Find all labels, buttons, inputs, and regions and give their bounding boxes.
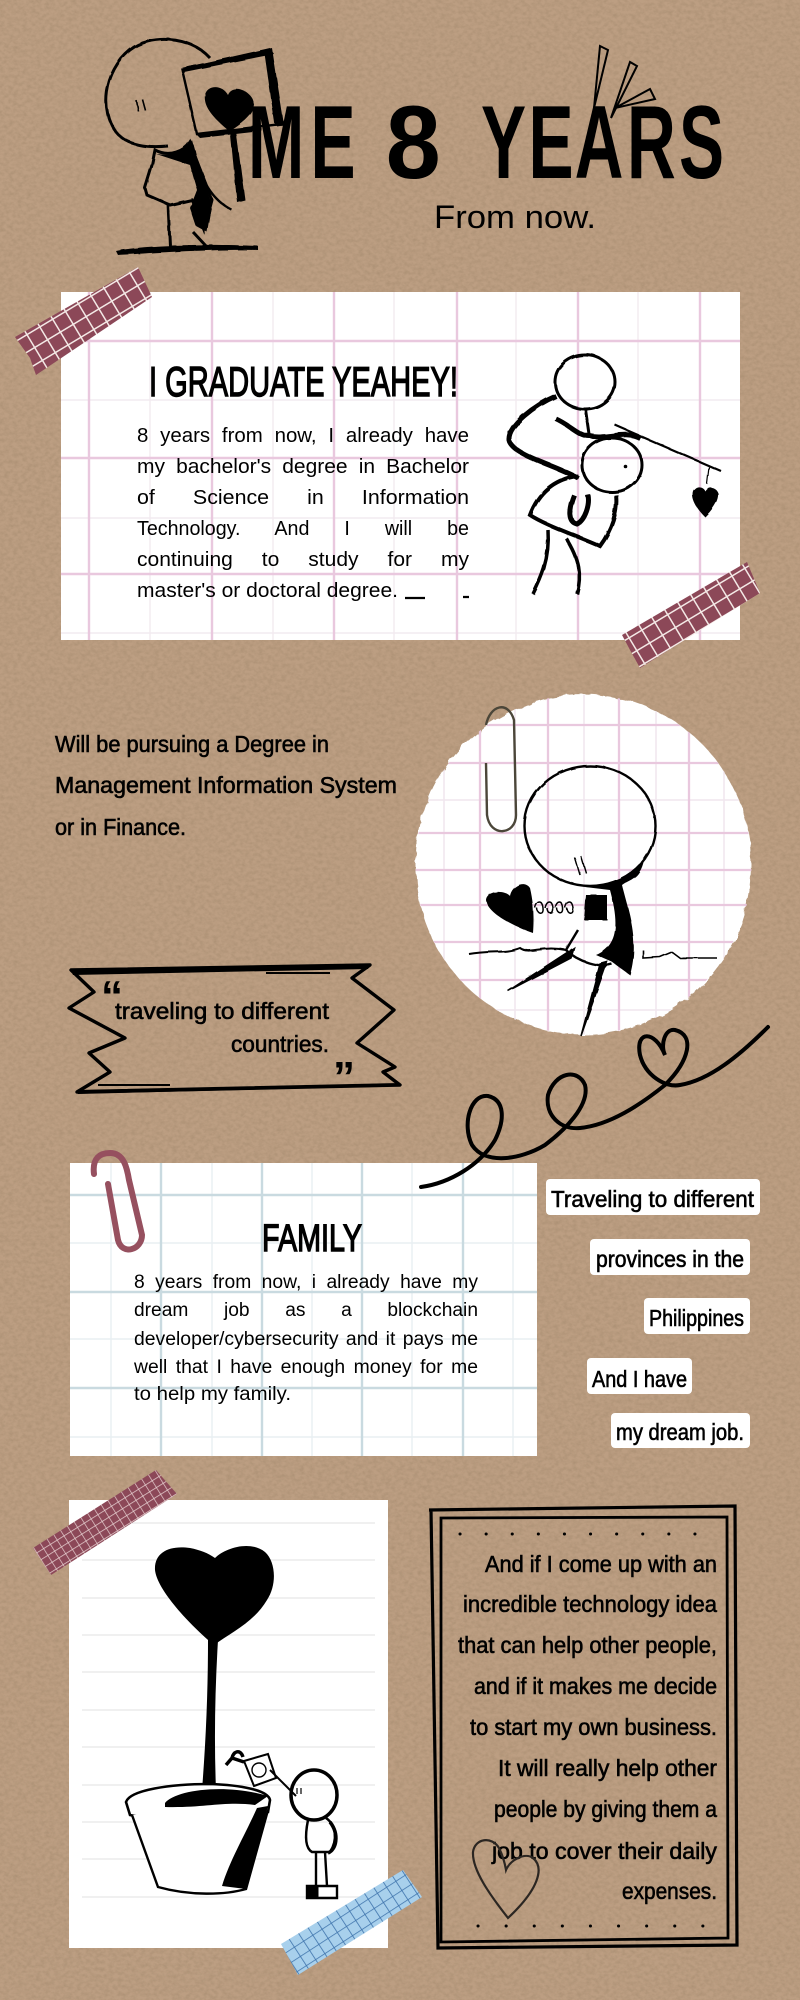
curly line with heart bbox=[421, 1027, 768, 1187]
text block: family: well that I have enough money for me bbox=[133, 1357, 478, 1378]
title: YEARS bbox=[481, 84, 724, 201]
text block: business idea: expenses. bbox=[622, 1878, 717, 1904]
subtitle: From now. bbox=[434, 199, 596, 235]
icon: opening quote: “ bbox=[101, 972, 123, 1021]
title: ME bbox=[248, 84, 356, 201]
text block: family: developer/cybersecurity and it pays me bbox=[134, 1329, 478, 1350]
label: dream job bbox=[611, 1413, 750, 1448]
illustration: stick figure holding heart sign bbox=[106, 39, 284, 255]
banner: traveling quote bbox=[69, 965, 400, 1102]
labels: traveling and dream job bbox=[546, 1179, 760, 1448]
text block: degree: Will be pursuing a Degree in bbox=[55, 731, 329, 757]
text block: business idea: job to cover their daily bbox=[491, 1838, 717, 1864]
text block: business idea: And if I come up with an bbox=[485, 1551, 717, 1577]
label: Philippines bbox=[644, 1298, 750, 1334]
washi tape: maroon fine bbox=[33, 1470, 177, 1575]
label: and I have: And I have bbox=[592, 1366, 687, 1392]
text block: degree bbox=[55, 731, 397, 840]
text block: graduate: my bachelor's degree in Bachelor bbox=[137, 456, 469, 478]
illustration: heart plant bbox=[126, 1546, 274, 1894]
accent ticks bbox=[594, 46, 655, 118]
banner text bbox=[115, 998, 330, 1057]
washi tape: top left bbox=[15, 267, 152, 375]
text block: business idea: people by giving them a bbox=[494, 1796, 717, 1822]
title bbox=[248, 84, 724, 201]
icon: maroon paperclip bbox=[94, 1153, 142, 1249]
text block: family: dream job as a blockchain bbox=[134, 1300, 478, 1321]
title: 8 bbox=[386, 85, 441, 201]
hand-drawn frame bbox=[429, 1506, 737, 1948]
label: traveling: Traveling to different bbox=[551, 1186, 755, 1212]
heading: graduate: I GRADUATE YEAHEY! bbox=[149, 358, 458, 405]
text block: degree: Management Information System bbox=[55, 772, 397, 798]
washi tape: blue bbox=[281, 1870, 422, 1975]
text block: business idea: It will really help other bbox=[498, 1755, 717, 1781]
text block: degree: or in Finance. bbox=[55, 814, 186, 840]
text block: graduate: 8 years from now, I already have bbox=[137, 425, 469, 447]
icon: dark paperclip bbox=[486, 707, 516, 831]
text block: graduate bbox=[137, 425, 469, 602]
text block: graduate: master's or doctoral degree. bbox=[137, 580, 398, 602]
text block: family: to help my family. bbox=[134, 1384, 291, 1405]
text block: business idea: incredible technology idea bbox=[463, 1591, 717, 1617]
heading: family: FAMILY bbox=[262, 1218, 362, 1260]
text block: business idea bbox=[458, 1551, 717, 1904]
text block: business idea: to start my own business. bbox=[470, 1714, 717, 1740]
washi tape: bottom right bbox=[622, 562, 760, 668]
text block: family: 8 years from now, i already have my bbox=[134, 1272, 478, 1293]
illustration: small figure watering bbox=[226, 1752, 337, 1898]
text block: business idea: and if it makes me decide bbox=[474, 1673, 717, 1699]
label: provinces bbox=[590, 1239, 750, 1275]
text block: graduate: of Science in Information bbox=[137, 487, 469, 509]
text block: graduate: Technology. And I will be bbox=[137, 518, 469, 540]
label: Philippines: Philippines bbox=[649, 1305, 744, 1331]
panel: lined note with heart plant bbox=[69, 1500, 388, 1948]
label: provinces: provinces in the bbox=[596, 1246, 744, 1272]
panel: family bbox=[70, 1163, 537, 1456]
panel: graduate bbox=[61, 292, 740, 640]
banner text: traveling to different bbox=[115, 998, 330, 1024]
label: and I have bbox=[587, 1358, 692, 1394]
illustration: figure with heart on a spring bbox=[469, 766, 717, 1036]
panel: circular torn note bbox=[410, 690, 760, 1040]
text block: business idea: that can help other people, bbox=[458, 1632, 717, 1658]
icon: outlined heart bbox=[473, 1840, 539, 1918]
illustration: carrying figure with heart on a stick bbox=[509, 355, 721, 594]
label: dream job: my dream job. bbox=[616, 1419, 744, 1445]
banner text: countries. bbox=[231, 1031, 329, 1057]
icon: closing quote: ” bbox=[333, 1053, 355, 1102]
text block: graduate: continuing to study for my bbox=[137, 549, 469, 571]
text block: family bbox=[133, 1272, 478, 1405]
